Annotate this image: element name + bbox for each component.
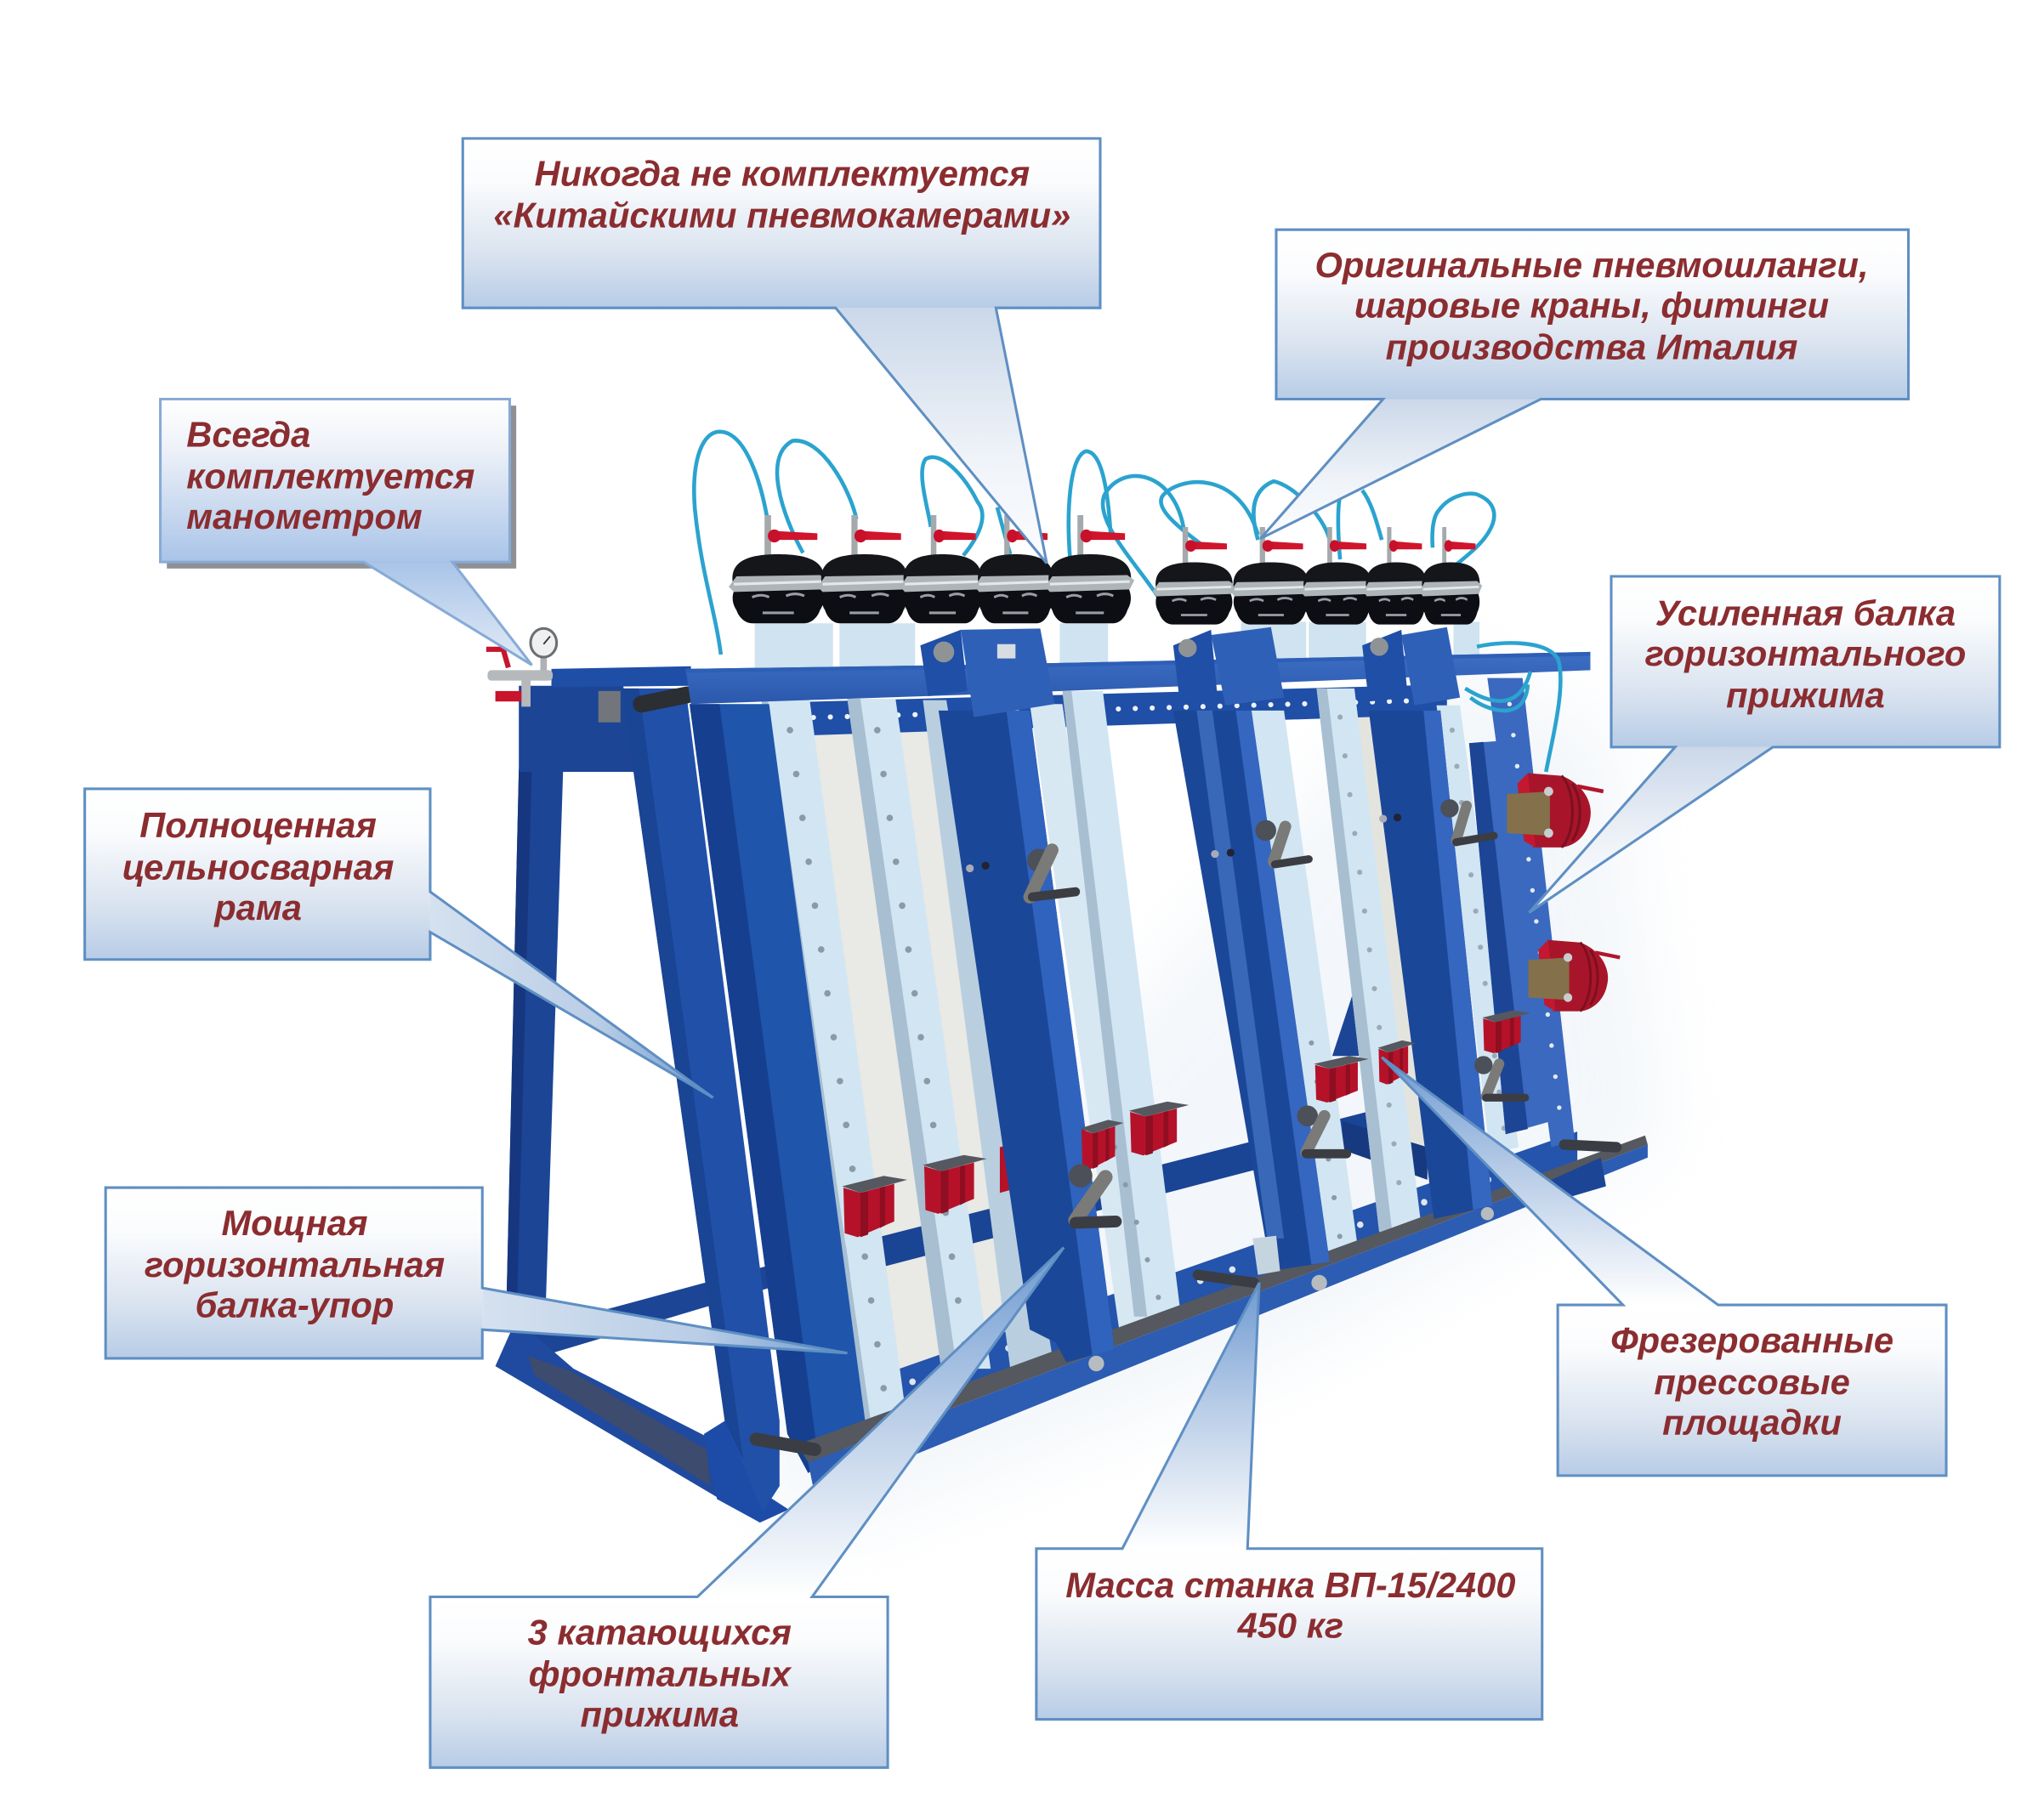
background glow behind machine: [730, 652, 1668, 1538]
pneumatic chambers with ball valves: [729, 515, 1482, 625]
callout text: производства Италия: [1386, 327, 1797, 367]
feet: [1088, 1207, 1494, 1371]
callout: milled pads: [1382, 1057, 1946, 1476]
callout: Italian hoses: [1261, 230, 1909, 539]
upper perforated rail: [769, 684, 1447, 737]
callout text: манометром: [186, 496, 423, 536]
callout text: прессовые: [1654, 1362, 1850, 1402]
callout text: прижима: [580, 1694, 739, 1734]
callout text: рама: [213, 887, 302, 927]
base frame: [496, 1319, 789, 1522]
callout text: 450 кг: [1237, 1606, 1343, 1646]
callout: reinforced beam: [1529, 576, 2000, 913]
front bottom beam: [798, 1136, 1648, 1495]
callout text: Мощная: [221, 1203, 368, 1243]
callout text: Никогда не комплектуется: [535, 154, 1030, 194]
rear and middle rails: [521, 945, 1577, 1421]
callout text: Полноценная: [139, 805, 377, 845]
callout text: «Китайскими пневмокамерами»: [493, 196, 1070, 235]
callout text: 3 катающихся: [528, 1612, 792, 1652]
machine: press frame: [486, 432, 1648, 1522]
callout text: Оригинальные пневмошланги,: [1314, 245, 1869, 285]
top beam with tube: [552, 652, 1590, 704]
callout text: балка-упор: [196, 1284, 394, 1324]
callout text: прижима: [1726, 675, 1885, 715]
slanted main posts: [622, 689, 867, 1512]
callout text: горизонтального: [1645, 633, 1966, 673]
support rods: [641, 695, 1616, 1449]
light blocks under chambers: [755, 622, 1479, 670]
callout text: Масса станка ВП-15/2400: [1065, 1565, 1515, 1605]
callout text: фронтальных: [529, 1653, 792, 1693]
callout text: горизонтальная: [145, 1245, 445, 1284]
cranks: [1027, 799, 1525, 1222]
callout text: площадки: [1662, 1402, 1842, 1442]
rear frame: [506, 686, 641, 1332]
callout: gauge: [161, 400, 532, 665]
callout text: комплектуется: [186, 456, 474, 496]
callout: horizontal stop beam: [105, 1188, 848, 1358]
callout: Chinese chambers: [463, 139, 1100, 564]
back panel: [724, 704, 1434, 1427]
rolling front clamp posts: [939, 711, 1492, 1363]
callout: welded frame: [85, 789, 713, 1097]
callout text: Усиленная балка: [1655, 592, 1956, 632]
pressure gauge and inlet fitting: [486, 628, 557, 706]
clamp top plates: [920, 627, 1460, 717]
end post and horizontal clamp beam: [1469, 678, 1575, 1148]
air hoses: [694, 432, 1560, 772]
callout text: Фрезерованные: [1610, 1320, 1894, 1360]
callout: front clamps: [430, 1248, 1064, 1767]
red press pads in front of posts: [1081, 1011, 1530, 1169]
perforated press strips: [761, 689, 1519, 1424]
red press pads behind posts: [842, 1056, 1369, 1237]
callout text: шаровые краны, фитинги: [1354, 286, 1829, 326]
callout: machine mass: [1036, 1283, 1542, 1720]
horizontal clamp diaphragm chambers: [1507, 774, 1620, 1012]
callout text: Всегда: [186, 414, 310, 454]
callout text: цельносварная: [122, 847, 394, 887]
